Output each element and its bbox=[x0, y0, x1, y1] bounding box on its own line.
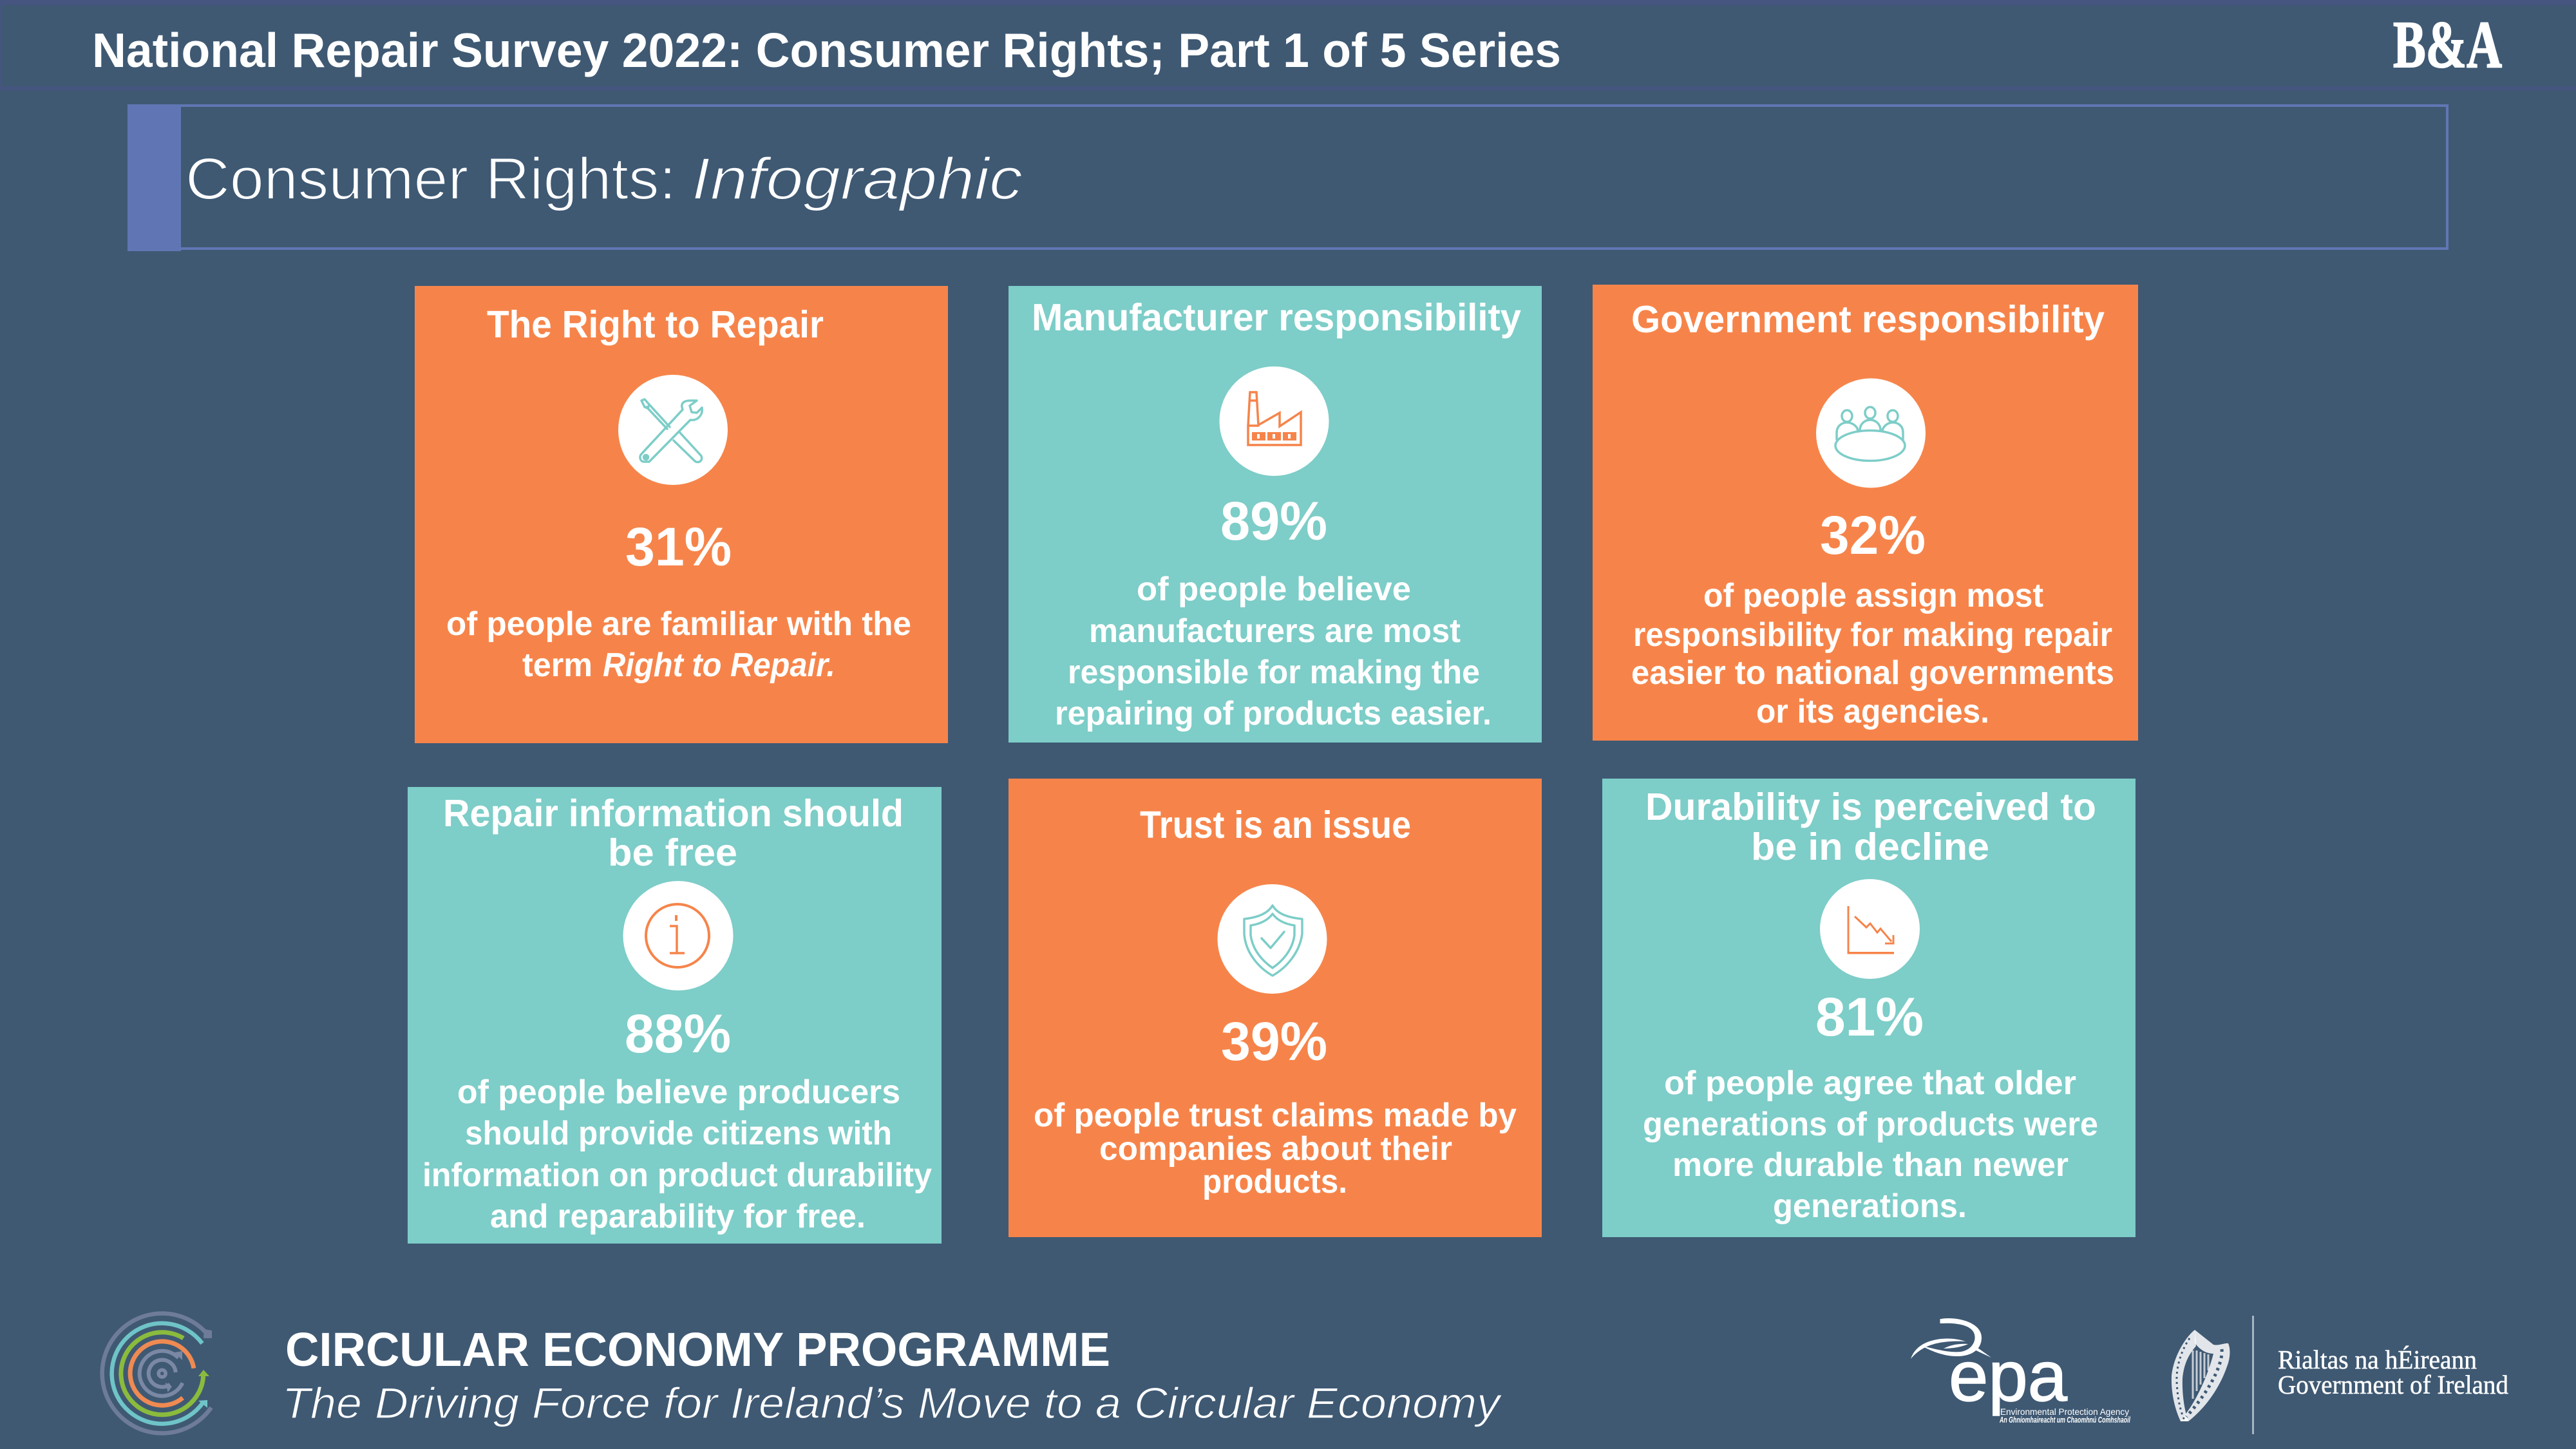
description: term bbox=[522, 647, 592, 684]
heading bbox=[1645, 786, 2096, 868]
heading: be free bbox=[608, 831, 737, 874]
heading: Trust is an issue bbox=[1140, 804, 1411, 846]
panel: Trust is an issue bbox=[1009, 779, 1542, 1237]
heading: Consumer Rights Infographic bbox=[185, 146, 1023, 212]
description bbox=[1055, 571, 1492, 732]
description bbox=[1034, 1097, 1517, 1200]
description: generations of products were bbox=[1643, 1106, 2098, 1143]
description bbox=[446, 605, 911, 684]
description: of people believe producers bbox=[457, 1074, 900, 1111]
description bbox=[1631, 577, 2114, 730]
description: manufacturers are most bbox=[1089, 612, 1461, 650]
description: easier to national governments bbox=[1631, 654, 2114, 692]
panel: Durability is perceived to be in decline bbox=[1602, 779, 2136, 1237]
logo: EPA: Environmental Protection Agency bbox=[2000, 1406, 2129, 1417]
panel: The Right to Repair bbox=[415, 286, 948, 743]
description: generations. bbox=[1773, 1188, 1967, 1225]
heading: Consumer Rights Infographic: Infographic bbox=[692, 146, 1023, 212]
icon: declining chart bbox=[1820, 879, 1920, 979]
description: or its agencies. bbox=[1756, 693, 1989, 730]
logo text: Government of Ireland bbox=[2278, 1345, 2508, 1399]
section heading box bbox=[128, 104, 2447, 251]
divider bbox=[2252, 1316, 2254, 1434]
icon: wrench and screwdriver bbox=[618, 375, 728, 485]
heading: Consumer Rights Infographic: Consumer Rights: bbox=[185, 146, 676, 212]
panel: Manufacturer responsibility bbox=[1009, 286, 1542, 743]
heading: be in decline bbox=[1751, 826, 1989, 868]
statistic 88%: 88% bbox=[625, 1003, 731, 1064]
programme title: CIRCULAR ECONOMY PROGRAMME bbox=[285, 1323, 1110, 1376]
statistic 31%: 31% bbox=[625, 516, 732, 577]
description: companies about their bbox=[1099, 1130, 1452, 1168]
logo text: Government of Ireland: Rialtas na hÉireann bbox=[2278, 1345, 2477, 1374]
icon: factory bbox=[1220, 366, 1329, 476]
description bbox=[422, 1074, 932, 1235]
description: of people trust claims made by bbox=[1034, 1097, 1517, 1134]
description: responsibility for making repair bbox=[1633, 616, 2112, 654]
heading: Durability is perceived to bbox=[1645, 786, 2096, 828]
statistic 39%: 39% bbox=[1221, 1011, 1327, 1072]
title: National Repair Survey 2022: Consumer Rights; Part 1 of 5 Series bbox=[92, 23, 1561, 77]
logo: EPA: An Ghníomhaireacht um Chaomhnú Comhshaoil bbox=[1999, 1415, 2130, 1425]
description: should provide citizens with bbox=[465, 1115, 892, 1152]
logo: EPA: epa bbox=[1949, 1337, 2068, 1416]
description: of people believe bbox=[1137, 571, 1411, 608]
description: more durable than newer bbox=[1672, 1146, 2069, 1184]
description: repairing of products easier. bbox=[1055, 695, 1492, 732]
heading: Government responsibility bbox=[1631, 298, 2105, 341]
description: responsible for making the bbox=[1068, 654, 1480, 691]
heading: Manufacturer responsibility bbox=[1032, 296, 1521, 339]
description bbox=[1643, 1065, 2098, 1225]
icon: people around table bbox=[1816, 379, 1926, 488]
panel: Government responsibility bbox=[1593, 285, 2138, 741]
logo: circular economy rings bbox=[102, 1313, 212, 1433]
header band bbox=[0, 0, 2576, 90]
logo: EPA bbox=[1911, 1318, 2130, 1425]
logo text: Government of Ireland: Government of Ireland bbox=[2278, 1370, 2508, 1399]
logo: B&A: B&A bbox=[2393, 8, 2502, 82]
icon: information bbox=[623, 881, 733, 990]
description: Right to Repair. bbox=[603, 647, 835, 684]
heading bbox=[443, 792, 904, 874]
description: products. bbox=[1202, 1163, 1347, 1200]
statistic 81%: 81% bbox=[1815, 987, 1924, 1047]
logo: harp emblem bbox=[2172, 1330, 2230, 1421]
heading: The Right to Repair bbox=[487, 303, 824, 346]
description: of people are familiar with the bbox=[446, 605, 911, 643]
description: of people assign most bbox=[1703, 577, 2043, 614]
programme tagline: The Driving Force for Ireland’s Move to a Circular Economy bbox=[282, 1379, 1502, 1428]
icon: shield with check bbox=[1217, 884, 1327, 994]
statistic 32%: 32% bbox=[1820, 505, 1926, 565]
description: and reparability for free. bbox=[490, 1198, 866, 1235]
heading: Repair information should bbox=[443, 792, 904, 835]
description: information on product durability bbox=[422, 1157, 932, 1194]
statistic 89%: 89% bbox=[1220, 491, 1327, 551]
panel: Repair information should be free bbox=[408, 787, 942, 1244]
description: of people agree that older bbox=[1664, 1065, 2076, 1102]
